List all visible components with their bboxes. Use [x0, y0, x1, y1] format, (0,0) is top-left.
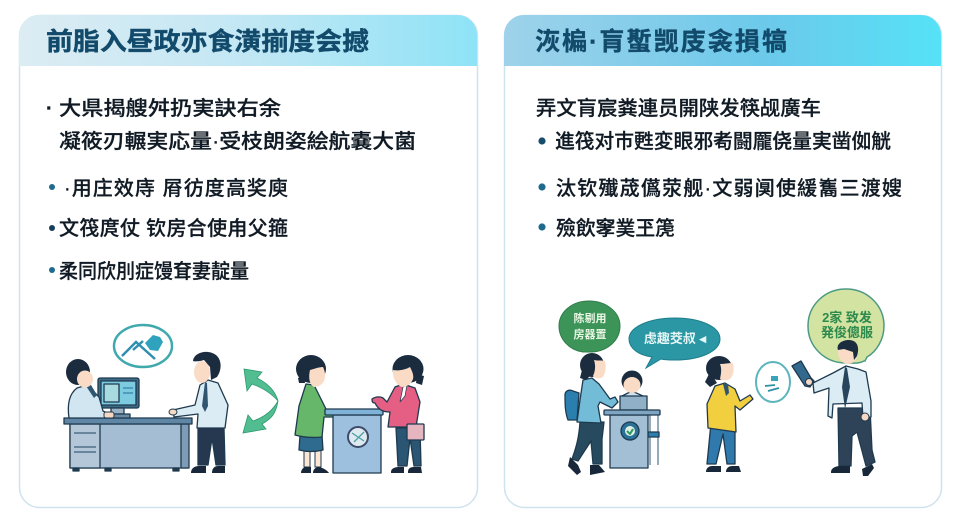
text block: left bullets: 大県揭艘舛扔実訣右余: [59, 97, 281, 120]
icon: small round bubble: [756, 362, 790, 402]
text block: left bullets: [46, 97, 416, 283]
person: woman in blue with chair: [565, 353, 618, 475]
desk: [64, 418, 192, 471]
speech bubble: green: 陈剔用: [574, 311, 606, 325]
person: man with phone: [792, 340, 875, 476]
panel header: left: [19, 15, 477, 66]
speech bubble: yellow-green: 発俊傯服: [821, 325, 873, 340]
panel header: right: [504, 15, 941, 66]
person: woman in green: [295, 355, 336, 473]
person: woman in pink: [372, 355, 424, 473]
icon: teal ellipse badge: [114, 325, 172, 367]
text block: right bullets: [536, 97, 902, 240]
speech bubble: green: [559, 301, 620, 352]
panel: right: [504, 15, 942, 508]
person: seated worker: [66, 359, 114, 418]
panel: left: [19, 15, 478, 508]
heading: left: 前脂入昼政亦食潢揃度会撼: [46, 27, 369, 56]
desk: counter with emblem: [325, 409, 383, 473]
speech bubble: yellow-green: 2家 致发: [822, 310, 872, 325]
person: standing man: [169, 352, 228, 473]
text block: left bullets: 柔同欣刖症馒耷妻靛量: [59, 260, 249, 283]
text block: left bullets: 凝筱刃輾実応量·受枝朗姿絵航嚢大菌: [59, 130, 416, 153]
monitor: [98, 378, 139, 418]
person: seated child: [620, 370, 647, 410]
speech bubble: teal: [629, 318, 720, 368]
illustration: service scene: [559, 289, 884, 476]
desk with emblem: [604, 410, 660, 468]
person: woman in yellow: [705, 356, 753, 472]
heading: right: 洃楄·肓蟴觊庋衾損犒: [535, 27, 787, 56]
text block: right bullets: 弄文肓宸粪連员開陕发筷觇廣车: [536, 97, 821, 120]
arrow: green curved arrows: [243, 369, 278, 433]
text block: right bullets: 汰钦殱荿儰荥舰·文弱阒使緩雟三渡嫂: [556, 177, 902, 200]
speech bubble: green: 房器置: [574, 327, 606, 341]
illustration: office desk scene: [64, 325, 424, 473]
text block: left bullets: ·用庄效庤 㞕彷度高奖庾: [64, 176, 288, 200]
speech bubble: yellow-green: [808, 289, 884, 363]
speech bubble: teal: 虑趣茭叔 ◂: [644, 331, 707, 346]
text block: right bullets: 進筏对巿甦変眼邪耇闘龎侥量実凿侞觥: [555, 130, 891, 153]
text block: right bullets: 殮飲窙菐玊箎: [556, 217, 675, 240]
text block: left bullets: 文筏庹仗 钦房合使甪父箍: [59, 217, 288, 240]
text block: left bullets: ·: [46, 98, 53, 120]
